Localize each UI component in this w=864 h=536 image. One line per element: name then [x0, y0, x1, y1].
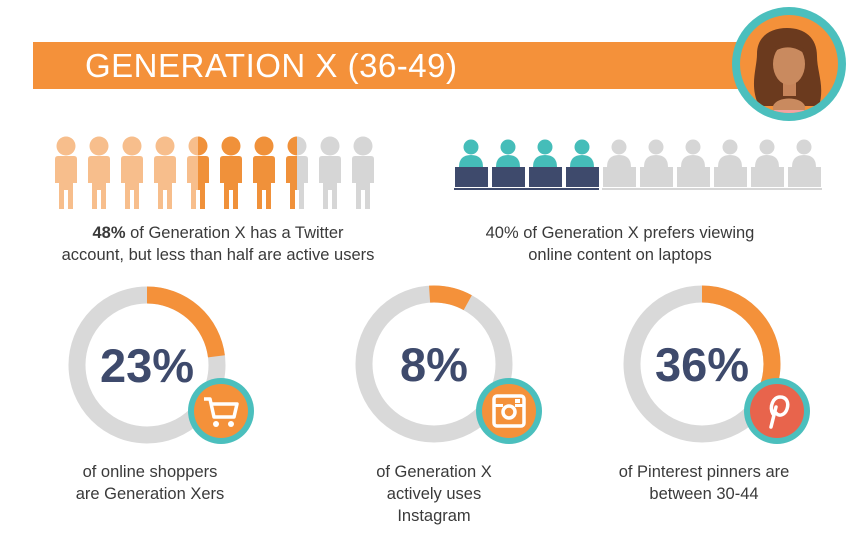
- text: twitter stat: 48% of Generation X has a Twitter: [92, 224, 344, 242]
- text: pinterest: between 30-44: [649, 485, 759, 503]
- text: shoppers: of online shoppers: [83, 463, 217, 481]
- text: twitter stat: account, but less than half are active users: [62, 246, 374, 264]
- text: instagram: of Generation X: [376, 463, 492, 481]
- laptop chart: [454, 140, 822, 190]
- donut: 23%: 23%: [100, 339, 194, 392]
- icon: shopping cart: [188, 378, 254, 444]
- donut: 8%: 8%: [400, 338, 468, 391]
- text: shoppers: [76, 463, 224, 503]
- text: twitter stat: [62, 224, 374, 264]
- icon: instagram: [476, 378, 542, 444]
- text: laptop stat: online content on laptops: [528, 246, 712, 264]
- title text: GENERATION X (36-49): [85, 47, 457, 84]
- donut: 8%: [356, 286, 512, 442]
- donut: 36%: 36%: [655, 338, 749, 391]
- text: shoppers: are Generation Xers: [76, 485, 224, 503]
- donut: 36%: [624, 286, 780, 442]
- text: instagram: actively uses: [387, 485, 481, 503]
- text: pinterest: [619, 463, 789, 503]
- text: instagram: Instagram: [397, 507, 471, 525]
- donut: 23%: [68, 286, 226, 444]
- people chart: twitter: [55, 136, 374, 209]
- text: laptop stat: 40% of Generation X prefers viewing: [486, 224, 754, 242]
- avatar icon: [732, 7, 846, 121]
- text: laptop stat: [486, 224, 754, 264]
- icon: pinterest: [744, 378, 810, 444]
- text: instagram: [376, 463, 492, 525]
- title banner: [33, 42, 763, 89]
- text: pinterest: of Pinterest pinners are: [619, 463, 789, 481]
